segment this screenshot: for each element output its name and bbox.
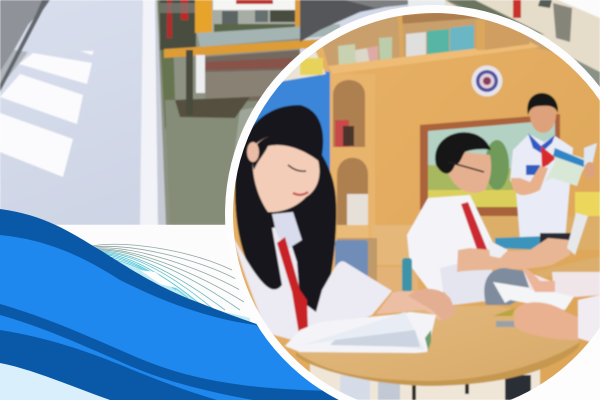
white ring frame around circular photo xyxy=(225,5,600,400)
arched niche column xyxy=(328,74,374,270)
paper on table and pen xyxy=(493,308,515,316)
building xyxy=(160,0,196,50)
girl collar xyxy=(272,212,302,250)
top right building xyxy=(444,0,600,72)
framed painting xyxy=(420,114,560,216)
gray chair xyxy=(484,267,530,306)
shape: teal wash below the contour lines xyxy=(105,256,250,325)
floor under table xyxy=(310,360,540,400)
drawers xyxy=(372,224,412,266)
desk table xyxy=(296,306,580,386)
upper shelf books xyxy=(337,16,475,66)
bright blue main wave xyxy=(0,235,340,400)
right person paper xyxy=(493,282,575,310)
girl tie xyxy=(277,237,308,334)
right table xyxy=(535,256,600,277)
dark corner structure xyxy=(0,0,43,72)
library wall xyxy=(230,10,600,400)
dark band lower xyxy=(0,330,217,400)
light blue corner xyxy=(0,363,110,400)
crest emblem xyxy=(472,66,502,96)
shape: white gap in fan xyxy=(140,270,176,288)
teal chair back xyxy=(495,236,548,250)
dark strip middle xyxy=(0,304,340,400)
photo: students in library (circular) xyxy=(230,10,600,400)
yellow note xyxy=(575,192,600,216)
dark blue upper wave xyxy=(0,209,340,400)
white ledge xyxy=(140,0,158,225)
sunlight patches on concrete xyxy=(0,51,94,177)
seated boy xyxy=(402,132,588,306)
girl face xyxy=(247,135,320,212)
long shelf board xyxy=(328,42,540,74)
white lower right corner xyxy=(490,318,600,400)
waves: layered blue bands xyxy=(0,209,340,400)
girl sleeve and arm xyxy=(376,291,455,320)
panel: lower white band xyxy=(0,225,300,400)
graphic: fine contour lines xyxy=(92,244,244,310)
left blue panel xyxy=(251,70,331,172)
open book xyxy=(285,312,436,353)
arm xyxy=(457,238,570,272)
girl hair xyxy=(235,105,336,317)
blue chair behind girl xyxy=(334,239,369,276)
panel: background photo of school building xyxy=(0,0,600,225)
back wood cabinet xyxy=(480,216,600,250)
right wall of shelf xyxy=(485,20,530,50)
standing boy xyxy=(510,93,597,240)
girl shirt xyxy=(233,225,392,342)
upper middle roof xyxy=(299,0,384,42)
head xyxy=(444,150,491,193)
courtyard ground xyxy=(157,0,300,225)
right person xyxy=(514,268,600,345)
upper shelf recess xyxy=(322,16,552,72)
